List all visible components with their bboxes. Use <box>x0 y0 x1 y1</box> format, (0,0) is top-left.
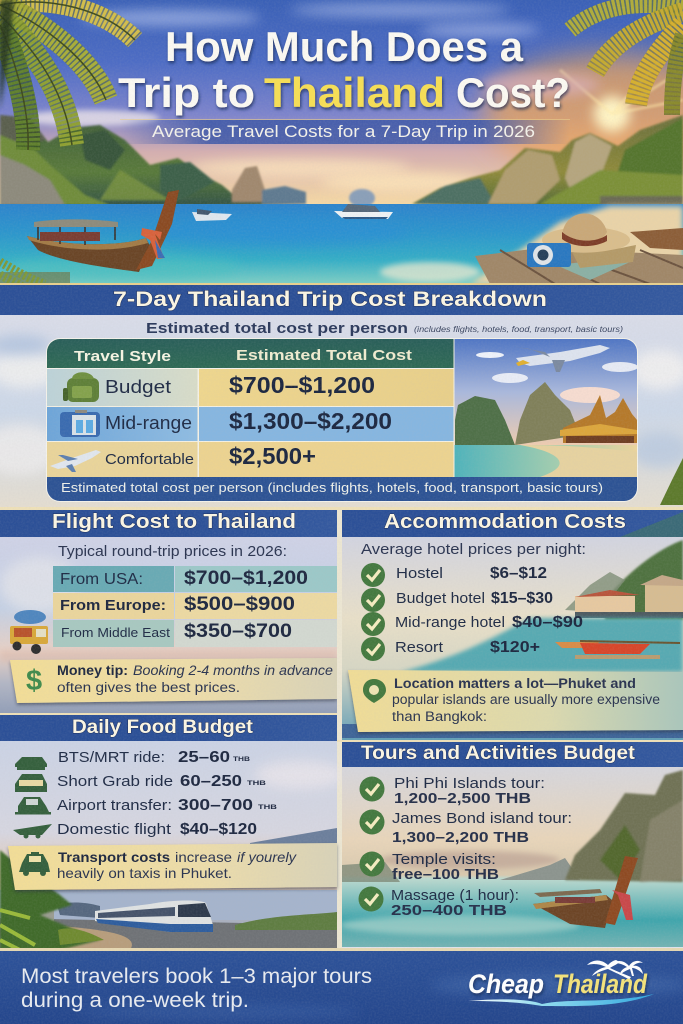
tours list: James Bond island tour: <box>392 810 572 827</box>
transport note: heavily on taxis in Phuket. <box>57 865 232 881</box>
speedboats <box>192 204 393 221</box>
price table: From USA: <box>60 571 143 588</box>
section banner: breakdown heading <box>0 283 683 315</box>
title: Thailand <box>264 69 445 116</box>
palm edge right <box>660 458 683 505</box>
location note: popular islands are usually more expensive <box>392 692 660 707</box>
heading <box>337 740 683 767</box>
frond bottom-left <box>0 262 45 290</box>
table header: Travel Style <box>74 348 171 365</box>
heading: Tours and Activities Budget <box>361 743 636 764</box>
row: mid-range: Mid-range <box>105 413 192 433</box>
transport list: Domestic flight <box>57 821 172 838</box>
palm fronds top-left <box>0 0 135 150</box>
swoosh <box>468 994 654 1006</box>
palm trees <box>587 960 643 980</box>
money tip note: Booking 2-4 months in advance <box>133 663 333 678</box>
row: comfortable <box>47 442 454 477</box>
heading <box>342 510 683 537</box>
footer note: during a one-week trip. <box>21 989 249 1012</box>
transport list: THB <box>258 805 278 811</box>
mountains left <box>0 115 306 210</box>
icon: tuk-tuk <box>10 610 48 654</box>
price table: From Middle East <box>61 625 170 640</box>
hotel list: Hostel <box>396 565 443 582</box>
check icons <box>358 776 384 912</box>
transport note: if yourely <box>237 849 297 865</box>
location note: Location matters a lot—Phuket and <box>394 676 636 691</box>
village scene <box>342 540 683 738</box>
table header: Estimated Total Cost <box>236 347 412 364</box>
price table: From Europe: <box>60 597 166 614</box>
icon: small plane <box>50 450 101 472</box>
section banner: breakdown heading: 7-Day Thailand Trip Cost Breakdown <box>113 288 547 311</box>
panel: flight cost: Typical round-trip prices in 2026: <box>58 543 287 560</box>
price table <box>53 566 337 647</box>
logo: Cheap Thailand: Thailand <box>553 969 647 999</box>
transport list: 25–60 <box>178 749 230 766</box>
hero scene: tropical bay <box>0 0 683 290</box>
icon: aircraft <box>13 824 52 838</box>
panel frame shadow <box>46 338 638 502</box>
tours list: Phi Phi Islands tour: <box>394 775 545 792</box>
row: mid-range <box>47 407 454 441</box>
subtitle band <box>120 119 570 144</box>
hotel list: Resort <box>395 639 444 656</box>
hotel list: Budget hotel <box>396 590 485 607</box>
estimate caption <box>146 320 623 337</box>
cost table <box>47 339 638 501</box>
panel: accommodation costs: Average hotel prices per night: <box>361 541 586 558</box>
icon: longtail boats <box>555 641 680 659</box>
transport list <box>13 749 278 838</box>
tours list: 1,200–2,500 THB <box>394 790 531 807</box>
title: How Much Does a <box>165 23 524 70</box>
heading <box>0 713 337 741</box>
tours list: Temple visits: <box>392 851 496 868</box>
estimate caption: Estimated total cost per person <box>146 320 408 337</box>
transport list: $40–$120 <box>180 821 257 838</box>
icon: suitcase <box>60 410 100 437</box>
money tip note <box>10 658 337 703</box>
tropical plants <box>0 850 104 955</box>
title: Cost? <box>456 69 570 116</box>
train <box>95 900 213 932</box>
heading <box>0 510 337 537</box>
transport list: THB <box>247 781 267 787</box>
table header <box>47 339 454 368</box>
dock with hat and camera <box>475 213 683 284</box>
hotel list: $40–$90 <box>512 614 583 631</box>
icon: sedan <box>15 797 51 814</box>
heading: Flight Cost to Thailand <box>52 511 296 533</box>
transport list: 60–250 <box>180 773 242 790</box>
transport list: Airport transfer: <box>57 797 172 814</box>
longtail boat <box>27 190 179 272</box>
hotel list: $120+ <box>490 639 540 656</box>
transport list: Short Grab ride <box>57 773 173 790</box>
sea <box>0 204 683 284</box>
travel photo: plane, karsts, temple <box>454 339 638 477</box>
tours list: Massage (1 hour): <box>391 887 519 904</box>
row: budget: $700–$1,200 <box>229 372 375 398</box>
hotel list: $6–$12 <box>490 565 547 582</box>
heading: Accommodation Costs <box>384 511 626 533</box>
icon: grab car <box>15 774 47 792</box>
panel: daily food budget <box>0 713 345 955</box>
icon: train car <box>15 757 47 770</box>
hotel list: $15–$30 <box>491 590 553 607</box>
icon: dollar sign: $ <box>26 665 42 697</box>
hotel list <box>361 563 583 661</box>
money tip note: often gives the best prices. <box>57 680 240 695</box>
location note <box>348 670 683 732</box>
location note: than Bangkok: <box>392 709 487 724</box>
table footer <box>47 477 637 501</box>
logo: Cheap Thailand <box>468 960 654 1006</box>
limestone cliffs <box>565 770 683 882</box>
hotel list: Mid-range hotel <box>395 614 505 631</box>
subtitle band: Average Travel Costs for a 7-Day Trip in 2026 <box>152 122 535 141</box>
row: mid-range: $1,300–$2,200 <box>229 408 392 434</box>
panel: 7-day cost breakdown <box>0 283 683 508</box>
tours list: 1,300–2,200 THB <box>392 829 529 846</box>
panel: tours and activities <box>337 740 683 947</box>
footer note <box>21 965 372 1012</box>
logo: Cheap Thailand: Cheap <box>468 969 544 999</box>
footer note: Most travelers book 1–3 major tours <box>21 965 372 988</box>
panel: flight cost <box>0 507 342 715</box>
sun glow <box>482 54 683 174</box>
transport note: increase <box>175 849 232 865</box>
plane <box>516 345 610 372</box>
row: comfortable: Comfortable <box>105 451 194 468</box>
transport list: 300–700 <box>178 797 253 814</box>
tours list: free–100 THB <box>392 866 499 883</box>
tours list <box>358 775 572 919</box>
heading: Daily Food Budget <box>72 717 254 738</box>
footer band <box>0 948 683 1024</box>
station box <box>22 906 54 940</box>
money tip note: Money tip: <box>57 663 128 678</box>
title: Trip to <box>118 69 255 116</box>
longtail boat <box>533 856 638 928</box>
title <box>118 23 570 116</box>
price table: $350–$700 <box>184 621 292 642</box>
palm fronds top-right <box>570 4 683 115</box>
panel: accommodation costs <box>337 507 683 951</box>
temple <box>560 395 637 443</box>
mountains right <box>349 115 683 210</box>
transport note: Transport costs <box>58 849 170 865</box>
icon: map pin <box>363 679 386 703</box>
row: budget <box>47 369 454 406</box>
transport note <box>8 843 337 890</box>
check icons <box>361 563 385 661</box>
price table: $500–$900 <box>184 594 295 615</box>
row: budget: Budget <box>105 377 171 397</box>
estimate caption: (includes flights, hotels, food, transport, basic tours) <box>414 324 623 334</box>
icon: backpack <box>63 372 99 402</box>
table footer: Estimated total cost per person (includes flights, hotels, food, transport, basic tours) <box>61 480 603 495</box>
price table: $700–$1,200 <box>184 568 308 589</box>
icon: taxi <box>19 852 50 876</box>
transport list: BTS/MRT ride: <box>58 749 165 766</box>
row: comfortable: $2,500+ <box>229 443 316 469</box>
transport list: THB <box>233 757 251 763</box>
train and road scene <box>0 890 337 950</box>
tours list: 250–400 THB <box>391 902 507 919</box>
